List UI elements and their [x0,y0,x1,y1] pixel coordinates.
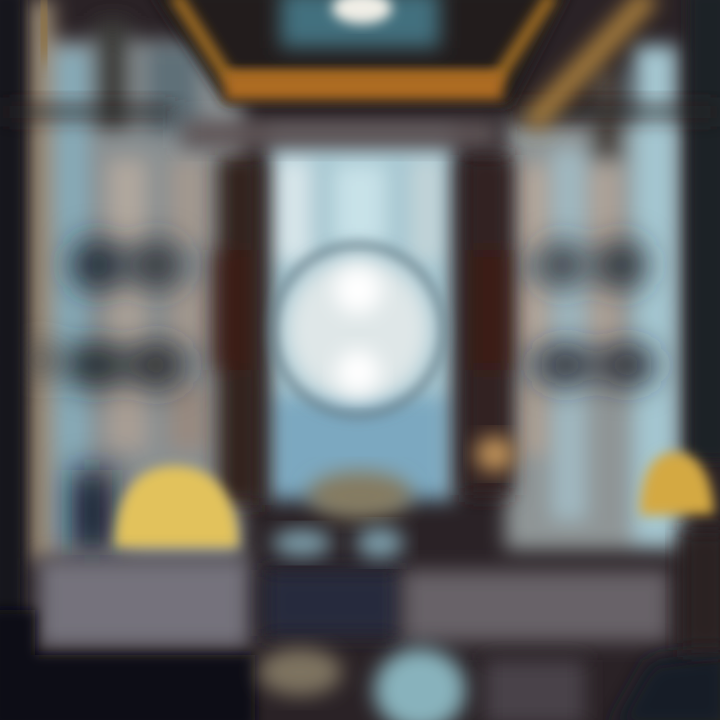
left window dark muntin spots [22,239,185,555]
dark brown pillars [212,155,514,505]
right window dark muntin spots [537,241,656,385]
right window wall [505,45,683,550]
floor [258,648,585,720]
lamps [115,436,714,548]
ceiling [42,0,650,125]
sofas and lower furniture [0,527,720,720]
rose window [274,246,442,414]
lintel [0,104,720,148]
center window [268,135,454,500]
left window wall [28,0,243,560]
